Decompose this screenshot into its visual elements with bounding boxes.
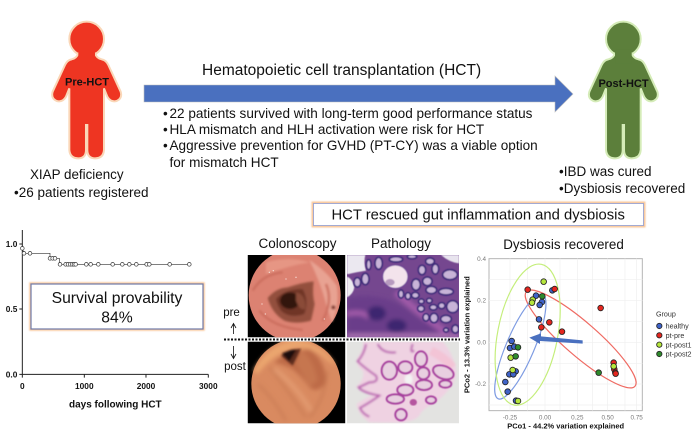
- legend: group: pt-post1: [666, 341, 692, 349]
- text: 26 patients registered: •26 patients registered: [14, 185, 149, 200]
- text: IBD was cured: •IBD was cured: [559, 164, 652, 179]
- heading: Colonoscopy: Colonoscopy: [258, 236, 337, 251]
- label: Post-HCT: Post-HCT: [598, 78, 649, 90]
- chart: survival curve: 0.5: [6, 304, 18, 314]
- legend: group: healthy: [666, 323, 689, 331]
- callout: survival probability 84%: [31, 284, 203, 329]
- chart: survival curve: 1000: [75, 381, 94, 391]
- text block: HCT outcomes: •: [163, 138, 168, 153]
- label: post with down arrow: post: [224, 361, 247, 373]
- label: pre with up arrow: [223, 307, 240, 334]
- legend: group: pt-pre: [666, 332, 684, 340]
- image: pathology post: [347, 342, 459, 423]
- label: Pre-HCT: Pre-HCT: [65, 76, 109, 88]
- callout: HCT rescued gut inflammation and dysbiosis: HCT rescued gut inflammation and dysbiosis: [332, 208, 625, 224]
- text block: HCT outcomes: Aggressive prevention for GVHD (PT-CY) was a viable option: [170, 138, 538, 153]
- chart: PCoA scatter plot: [462, 256, 646, 431]
- image: colonoscopy post: [248, 339, 345, 429]
- label: post with down arrow: [224, 346, 247, 373]
- image: colonoscopy pre: [248, 255, 346, 338]
- text: XIAP deficiency: XIAP deficiency: [30, 167, 124, 182]
- chart: survival curve: 3000: [199, 381, 218, 391]
- chart: survival curve: 2000: [137, 381, 156, 391]
- text block: HCT outcomes: •: [163, 106, 168, 121]
- heading: Hematopoietic cell transplantation: Hematopoietic cell transplantation (HCT): [202, 62, 481, 79]
- text block: HCT outcomes: •: [163, 122, 168, 137]
- chart: PCoA scatter plot: 0.00: [539, 415, 552, 422]
- figure: post-HCT person: [589, 22, 658, 158]
- image: pathology pre: [347, 255, 459, 338]
- chart: PCoA scatter plot: 0.4: [477, 256, 486, 263]
- chart: survival curve: [6, 230, 218, 410]
- chart: PCoA scatter plot: PCo1 - 44.2% variation explained: [507, 422, 625, 431]
- heading: Pathology: Pathology: [371, 236, 431, 251]
- chart: survival curve: days following HCT: [69, 399, 162, 410]
- text block: HCT outcomes: [163, 106, 538, 170]
- arrow: pre to post HCT: [144, 76, 573, 112]
- text block: HCT outcomes: 22 patients survived with long-term good performance status: [170, 106, 533, 121]
- chart: PCoA scatter plot: 0.25: [571, 415, 584, 422]
- text block: HCT outcomes: HLA mismatch and HLH activation were risk for HCT: [170, 122, 484, 137]
- chart: PCoA scatter plot: -0.2: [475, 381, 486, 388]
- chart: PCoA scatter plot: 0.75: [630, 415, 643, 422]
- chart: PCoA scatter plot: 0.2: [477, 298, 486, 305]
- label: pre with up arrow: pre: [223, 307, 240, 319]
- callout: survival probability 84%: 84%: [101, 310, 133, 326]
- heading: Dysbiosis recovered: Dysbiosis recovered: [503, 237, 624, 252]
- text block: HCT outcomes: for mismatch HCT: [170, 155, 279, 170]
- chart: PCoA scatter plot: -0.25: [503, 415, 518, 422]
- text: Dysbiosis recovered: •Dysbiosis recovered: [559, 181, 685, 196]
- callout: HCT rescued gut inflammation and dysbiosis: [313, 203, 644, 226]
- figure: pre-HCT person: [52, 22, 121, 158]
- divider: pre/post dotted line: [224, 338, 460, 340]
- chart: survival curve: 0.0: [6, 369, 18, 379]
- legend: group: [656, 311, 692, 359]
- chart: survival curve: 1.0: [6, 239, 18, 249]
- chart: PCoA scatter plot: 0.50: [601, 415, 614, 422]
- callout: survival probability 84%: Survival provability: [52, 290, 183, 307]
- chart: PCoA scatter plot: PCo2 - 13.3% variation explained: [462, 276, 471, 393]
- legend: group: pt-post2: [666, 351, 692, 359]
- chart: survival curve: 0: [20, 381, 25, 391]
- chart: PCoA scatter plot: 0.0: [477, 339, 486, 346]
- legend: group: Group: [656, 311, 676, 319]
